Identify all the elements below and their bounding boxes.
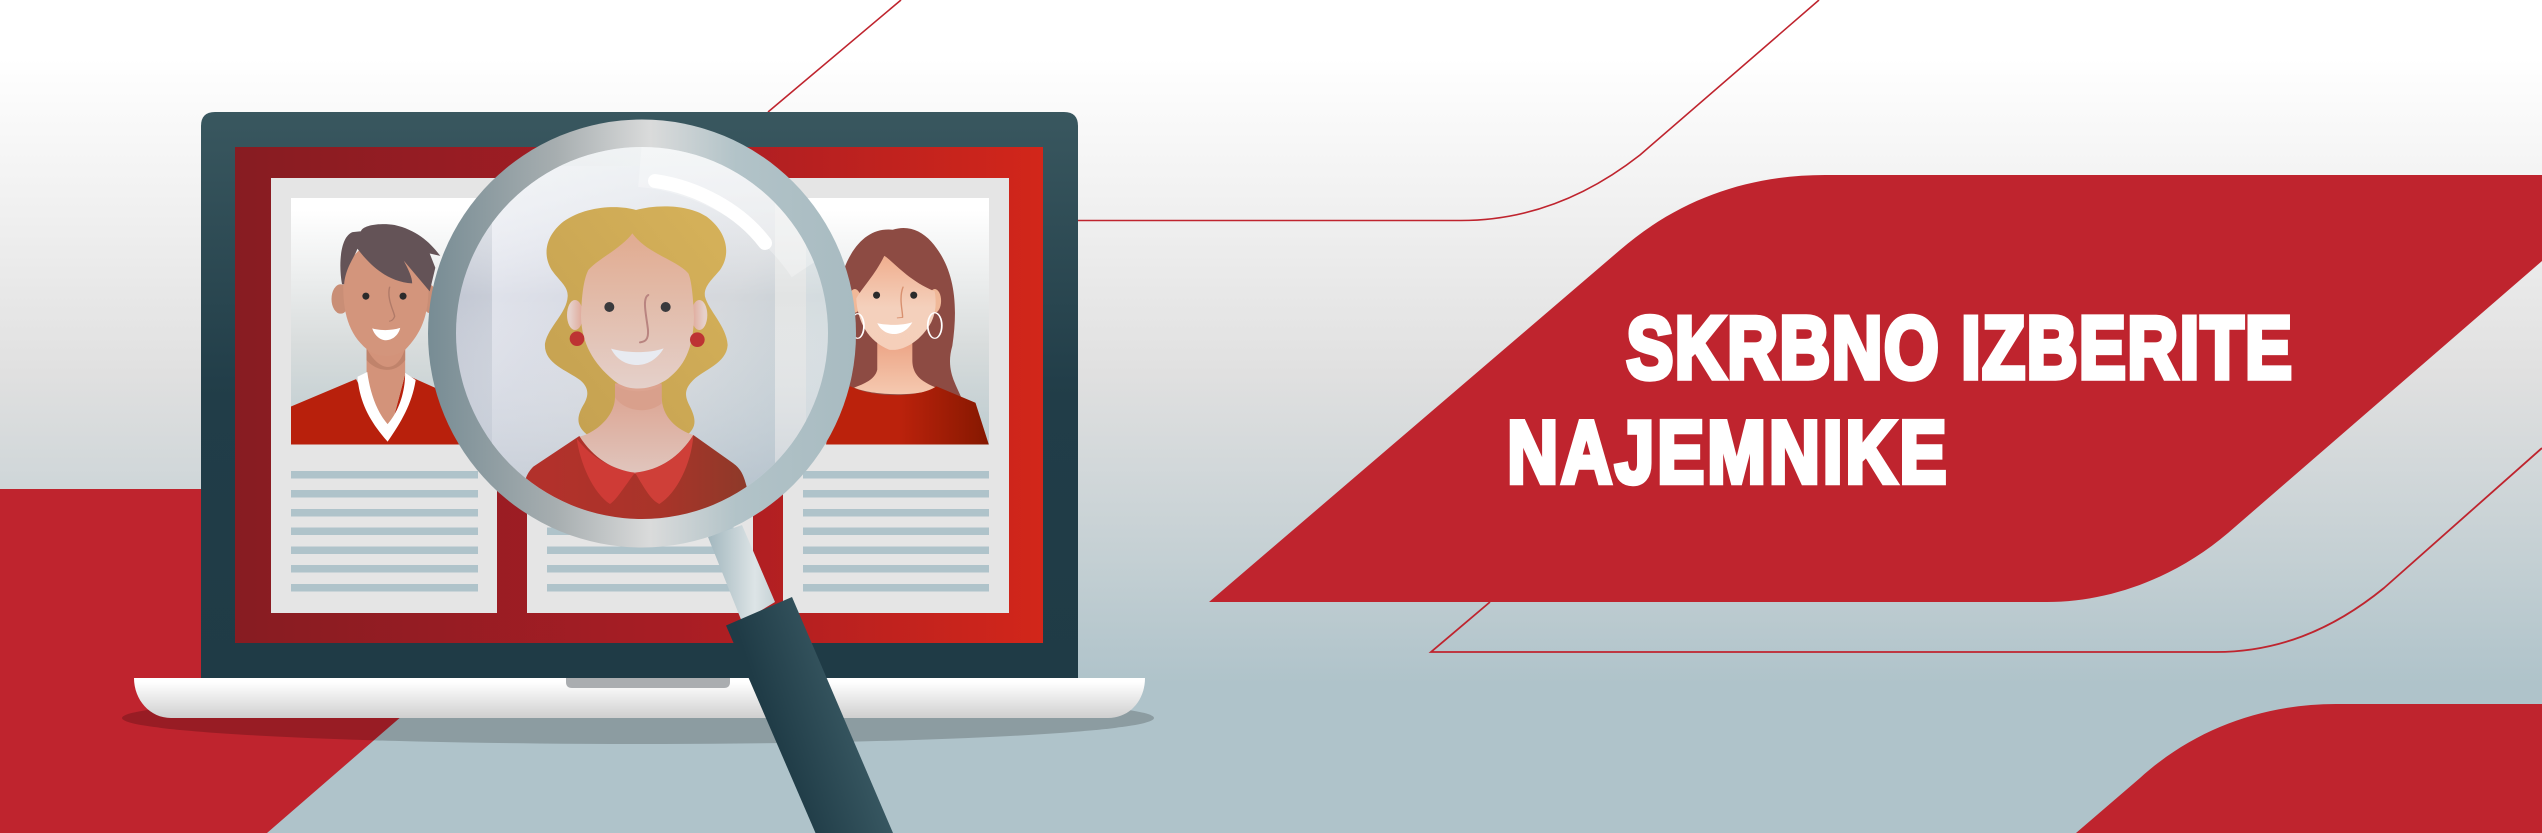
profile card: left (271, 178, 497, 613)
metal ring (428, 120, 856, 548)
laptop shadow (122, 692, 1154, 744)
lens glass (456, 147, 828, 523)
text lines: right card (803, 471, 989, 592)
profile card: right (783, 178, 1009, 613)
magnifying glass (428, 120, 893, 833)
lens sheen (770, 245, 814, 268)
magnified portrait: blonde woman (525, 206, 753, 523)
red title banner (1209, 175, 2542, 602)
title: SKRBNO IZBERITE (1626, 298, 2292, 397)
profile card: centre (527, 178, 753, 613)
metal stem (708, 525, 775, 622)
title: NAJEMNIKE (1507, 403, 1946, 501)
portrait: woman with brown hair (826, 228, 989, 444)
laptop screen (235, 147, 1043, 643)
laptop notch (566, 678, 730, 688)
text lines: left card (291, 471, 478, 592)
laptop (134, 112, 1145, 718)
title (1507, 298, 2292, 501)
text lines: centre card (547, 528, 734, 592)
lens highlight (655, 181, 765, 243)
thin red outline: top (768, 0, 1819, 220)
handle grip (726, 597, 893, 833)
red shape: bottom left (0, 489, 500, 833)
red shape: bottom right (2076, 704, 2542, 833)
portrait: man (291, 224, 472, 444)
thin red outline: lower right (1431, 448, 2542, 652)
laptop bezel (201, 112, 1078, 678)
laptop base (134, 678, 1145, 718)
